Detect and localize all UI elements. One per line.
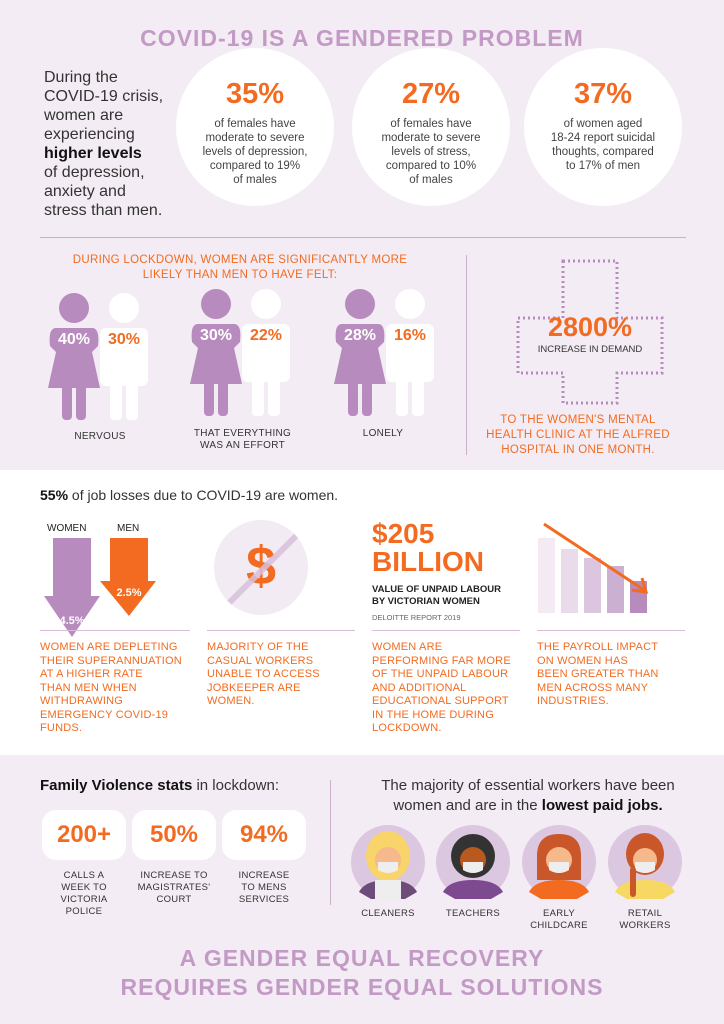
dollar icon (214, 520, 308, 615)
lockdown heading: LIKELY THAN MEN TO HAVE FELT: (143, 269, 337, 281)
column texts: WITHDRAWING (40, 695, 123, 707)
stat circle 37% (524, 48, 682, 206)
text: CALLS A (64, 870, 104, 881)
text: SERVICES (239, 894, 289, 905)
text: RETAIL (628, 908, 662, 919)
arrows chart (44, 523, 156, 637)
stat circle 27%: levels of stress, (391, 146, 471, 158)
205 billion: DELOITTE REPORT 2019 (372, 613, 461, 622)
column texts: FUNDS. (40, 722, 82, 734)
stat circle 35%: of males (233, 174, 277, 186)
essential workers text: The majority of essential workers have been (381, 777, 675, 794)
text: TO MENS (241, 882, 287, 893)
text: CLEANERS (361, 908, 415, 919)
lockdown heading: DURING LOCKDOWN, WOMEN ARE SIGNIFICANTLY MORE (73, 254, 407, 266)
stat circle 35% (176, 48, 334, 206)
cross icon with 2800%: INCREASE IN DEMAND (538, 344, 642, 355)
stat circle 35%: of females have (214, 118, 296, 130)
text: WAS AN EFFORT (200, 440, 285, 451)
text: PERFORMING FAR MORE (372, 654, 511, 666)
column texts: WOMEN ARE DEPLETING (40, 641, 178, 653)
text: EDUCATIONAL SUPPORT (372, 695, 509, 707)
lockdown heading (73, 254, 407, 281)
stat circle 35%: moderate to severe (205, 132, 305, 144)
205 billion: $205 (372, 518, 434, 549)
stat circle 35%: levels of depression, (203, 146, 307, 158)
stat circle 27%: of females have (390, 118, 472, 130)
stat boxes (42, 810, 126, 860)
alfred text: TO THE WOMEN'S MENTAL (500, 414, 656, 426)
text: COURT (156, 894, 192, 905)
stat circle 37%: 37% (574, 78, 632, 110)
stat circle 27%: compared to 10% (386, 160, 476, 172)
text: CASUAL WORKERS (207, 654, 313, 666)
text: 50% (150, 821, 198, 848)
205 billion: BY VICTORIAN WOMEN (372, 596, 480, 607)
text: THAT EVERYTHING (194, 428, 291, 439)
text: LONELY (363, 428, 403, 439)
column texts (40, 630, 190, 736)
stat circle 37%: 18-24 report suicidal (551, 132, 655, 144)
stat circle 27%: of males (409, 174, 453, 186)
arrows chart: WOMEN (47, 523, 86, 534)
stat circle 27%: 27% (402, 78, 460, 110)
205 billion: BILLION (372, 546, 484, 577)
text: MAGISTRATES' (138, 882, 210, 893)
stat circle 35%: 35% (226, 78, 284, 110)
essential workers text (381, 777, 675, 814)
nervous: 30% (108, 331, 140, 348)
text: AND ADDITIONAL (372, 682, 466, 694)
text: ON WOMEN HAS (537, 654, 628, 666)
text: WOMEN ARE (372, 641, 442, 653)
text: 94% (240, 821, 288, 848)
family violence heading: Family Violence stats in lockdown: (40, 777, 279, 794)
cross icon with 2800%: 2800% (548, 312, 632, 342)
arrows chart: MEN (117, 523, 139, 534)
alfred text (486, 414, 670, 456)
closing title: A GENDER EQUAL RECOVERY (180, 945, 544, 971)
text: JOBKEEPER ARE (207, 682, 301, 694)
text: OF THE UNPAID LABOUR (372, 668, 508, 680)
column texts: EMERGENCY COVID-19 (40, 708, 168, 720)
lonely (334, 289, 434, 416)
intro text: During the (44, 69, 118, 86)
column texts: AT A HIGHER RATE (40, 668, 143, 680)
text: INCREASE (239, 870, 289, 881)
dollar icon: $ (246, 536, 276, 596)
arrows chart: 2.5% (116, 587, 142, 599)
text: EARLY (543, 908, 575, 919)
job losses heading: 55% of job losses due to COVID-19 are women. (40, 487, 338, 503)
closing title (121, 945, 603, 1000)
stat boxes: 200+ (57, 821, 111, 848)
alfred text: HEALTH CLINIC AT THE ALFRED (486, 429, 670, 441)
text: LOCKDOWN. (372, 722, 442, 734)
stat circle 37%: thoughts, compared (552, 146, 654, 158)
text: VICTORIA (60, 894, 108, 905)
cross icon with 2800% (516, 260, 664, 404)
nervous (48, 293, 148, 420)
intro text: women are (44, 107, 123, 124)
text: TEACHERS (446, 908, 500, 919)
intro text: experiencing (44, 126, 135, 143)
title: COVID-19 IS A GENDERED PROBLEM (140, 25, 584, 51)
nervous: 40% (58, 331, 90, 348)
text: WORKERS (619, 920, 671, 931)
intro text: of depression, (44, 164, 145, 181)
text: MEN ACROSS MANY (537, 682, 648, 694)
lonely: 28% (344, 327, 376, 344)
text: INDUSTRIES. (537, 695, 609, 707)
figure labels: NERVOUS (74, 431, 126, 442)
stat circle 37%: of women aged (564, 118, 642, 130)
stat circle 35%: compared to 19% (210, 160, 300, 172)
205 billion: VALUE OF UNPAID LABOUR (372, 584, 501, 595)
effort (190, 289, 290, 416)
alfred text: HOSPITAL IN ONE MONTH. (501, 444, 655, 456)
205 billion (372, 518, 501, 622)
text: CHILDCARE (530, 920, 588, 931)
text: THE PAYROLL IMPACT (537, 641, 658, 653)
intro text (44, 69, 163, 219)
text: MAJORITY OF THE (207, 641, 309, 653)
text: WEEK TO (61, 882, 107, 893)
text: IN THE HOME DURING (372, 708, 494, 720)
figures chart (48, 289, 434, 420)
lonely: 16% (394, 327, 426, 344)
intro text: higher levels (44, 145, 142, 162)
column texts: THAN MEN WHEN (40, 682, 137, 694)
text: 4.5% (59, 615, 85, 627)
text: POLICE (66, 906, 102, 917)
effort: 22% (250, 327, 282, 344)
text: INCREASE TO (140, 870, 208, 881)
column texts: THEIR SUPERANNUATION (40, 654, 182, 666)
text: WOMEN. (207, 695, 255, 707)
essential workers text: women and are in the lowest paid jobs. (393, 797, 663, 814)
stat circle 37%: to 17% of men (566, 160, 640, 172)
intro text: COVID-19 crisis, (44, 88, 163, 105)
payroll bar chart (538, 522, 648, 613)
stat circle 27% (352, 48, 510, 206)
intro text: stress than men. (44, 202, 162, 219)
stat circle 27%: moderate to severe (381, 132, 481, 144)
intro text: anxiety and (44, 183, 126, 200)
effort: 30% (200, 327, 232, 344)
worker icons (351, 825, 682, 899)
text: UNABLE TO ACCESS (207, 668, 320, 680)
text: BEEN GREATER THAN (537, 668, 659, 680)
closing title: REQUIRES GENDER EQUAL SOLUTIONS (121, 974, 603, 1000)
white middle band (0, 470, 724, 755)
